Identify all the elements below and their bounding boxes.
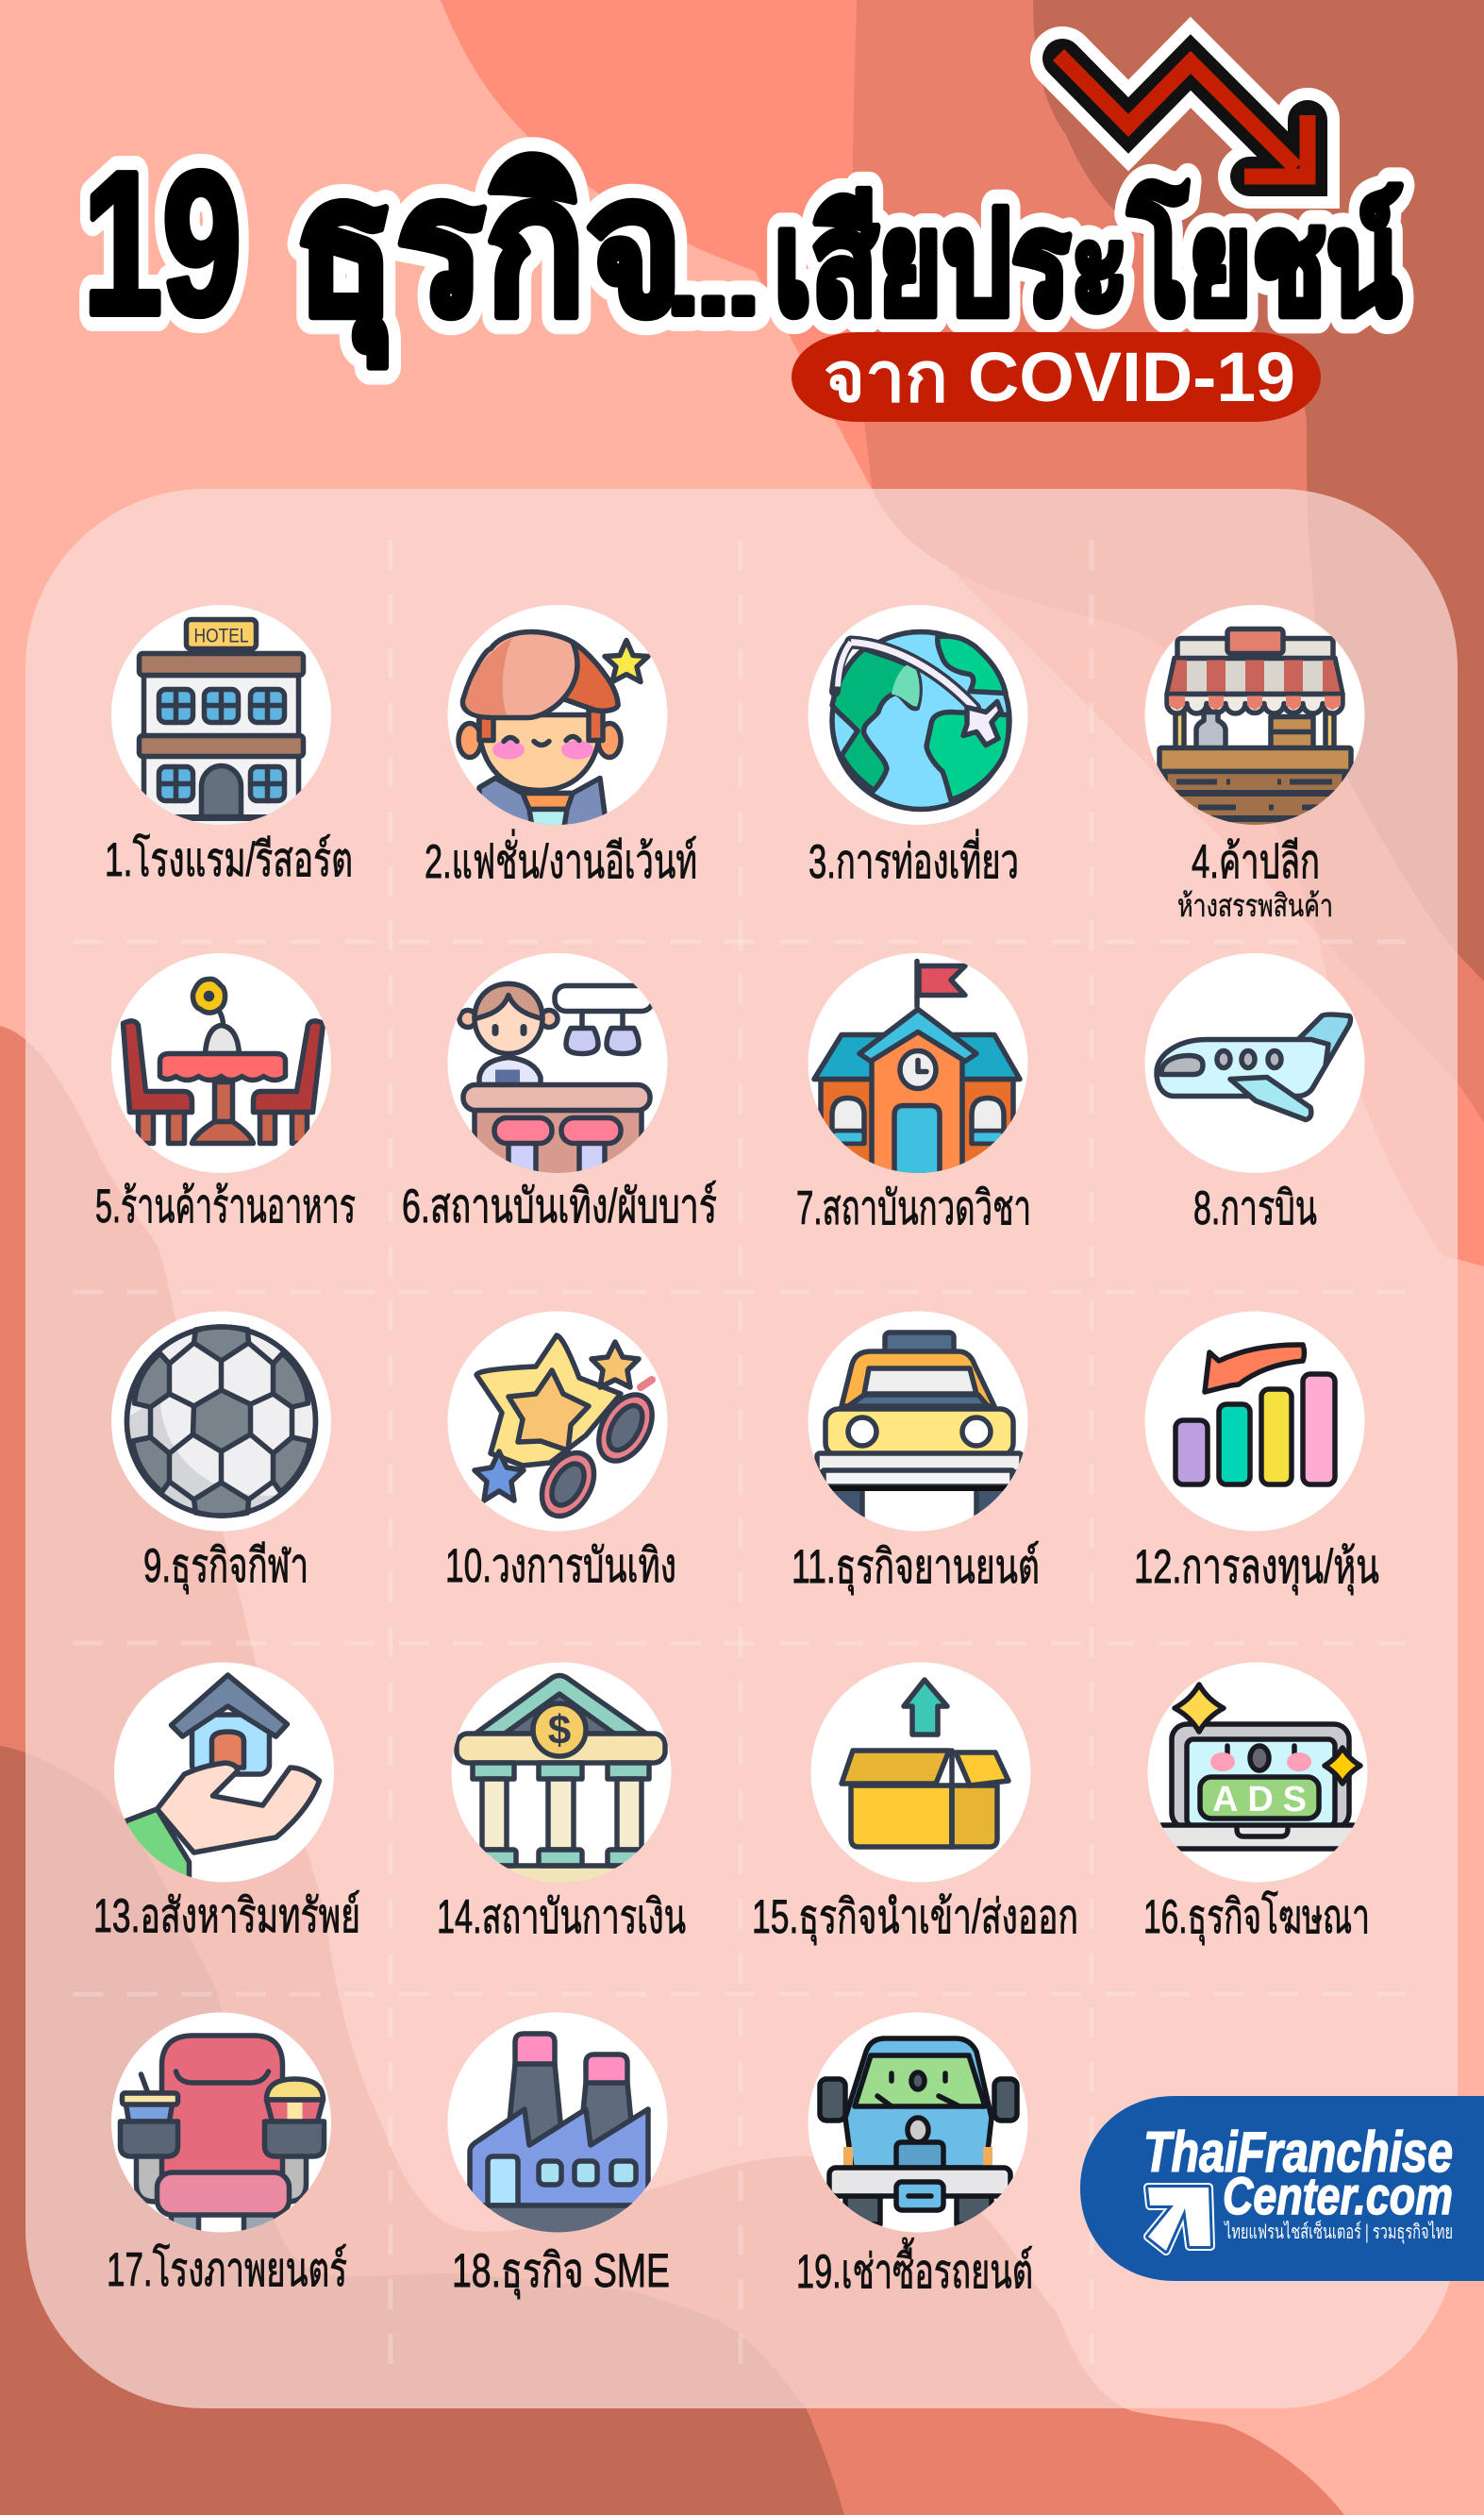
item 16: advertising: [1143, 1663, 1370, 1945]
item 15: import / export: [752, 1663, 1078, 1945]
icon: market stall: [1145, 605, 1364, 829]
grid: dashed dividers: [73, 540, 1406, 2364]
label: 15.ธุรกิจนำเข้า/ส่งออก: [752, 1890, 1078, 1945]
label: 4.ค้าปลีก: [1192, 835, 1320, 888]
icon: bank: $: [548, 1707, 571, 1753]
icon: box with arrow: [811, 1663, 1030, 1882]
label: 8.การบิน: [1193, 1182, 1317, 1234]
label: 3.การท่องเที่ยว: [809, 830, 1019, 888]
item 4: retail: [1145, 605, 1364, 923]
title: ...: [668, 225, 759, 335]
logo: ThaiFranchise Center.com: [1080, 2096, 1484, 2281]
label: 2.แฟชั่น/งานอีเว้นท์: [425, 830, 697, 888]
label: 5.ร้านค้าร้านอาหาร: [95, 1180, 356, 1232]
item 14: financial institutions: [437, 1663, 686, 1943]
item 6: entertainment venues / pubs: [402, 953, 717, 1232]
label: 18.ธุรกิจ SME: [452, 2244, 670, 2299]
label: 13.อสังหาริมทรัพย์: [93, 1889, 360, 1942]
label: 17.โรงภาพยนตร์: [107, 2243, 347, 2296]
title: ...: [668, 225, 759, 335]
label: [1177, 835, 1333, 923]
badge: from COVID-19: จาก COVID-19: [824, 338, 1295, 416]
item 1: hotel: [105, 605, 353, 886]
icon: logo arrow: [1148, 2188, 1210, 2251]
item 9: sports: [111, 1312, 331, 1594]
icon: cinema seat: [111, 2012, 331, 2240]
arrow: falling trend: [1059, 55, 1308, 176]
icon: school: [808, 953, 1028, 1182]
icon: house in hand: [114, 1663, 334, 1886]
label: 10.วงการบันเทิง: [445, 1539, 676, 1592]
label: 7.สถาบันกวดวิชา: [796, 1182, 1031, 1234]
item 5: restaurants: [95, 953, 356, 1232]
icon: globe: [808, 605, 1028, 825]
item 19: car leasing: [796, 2012, 1033, 2298]
item 11: automotive: [792, 1312, 1040, 1595]
icon: factory: [447, 2012, 668, 2243]
title: ธุรกิจ: [294, 139, 683, 367]
title: [83, 129, 1402, 367]
item 10: entertainment industry: [445, 1312, 676, 1592]
label: 14.สถาบันการเงิน: [437, 1890, 686, 1943]
icon: taxi: [808, 1312, 1028, 1531]
panel: translucent rounded card: [25, 489, 1458, 2408]
icon: hotel: [111, 605, 331, 836]
icon: truck: [808, 2012, 1028, 2233]
icon: stars and sunglasses: [447, 1312, 668, 1531]
item 7: tutoring schools: [796, 953, 1031, 1234]
label: 19.เช่าซื้อรถยนต์: [796, 2238, 1033, 2298]
label: 16.ธุรกิจโฆษณา: [1143, 1890, 1370, 1945]
label: 6.สถานบันเทิง/ผับบาร์: [402, 1180, 717, 1232]
title: 19: [83, 129, 242, 357]
item 13: real estate: [93, 1663, 360, 1942]
label: 12.การลงทุน/หุ้น: [1134, 1540, 1379, 1595]
icon: laptop ads: [1147, 1663, 1368, 1882]
item 3: tourism: [808, 605, 1028, 888]
title: ธุรกิจ: [294, 139, 683, 367]
icon: bartender: [447, 953, 668, 1185]
icon: dining table: [111, 953, 331, 1173]
title: 19: [83, 129, 242, 357]
label: ห้างสรรพสินค้า: [1177, 888, 1333, 923]
item 18: SME: [447, 2012, 670, 2299]
item 12: investment / stocks: [1134, 1312, 1379, 1595]
icon: soccer ball: [111, 1312, 331, 1531]
icon: bar chart with arrow: [1145, 1312, 1364, 1531]
icon: airplane: [1145, 953, 1364, 1173]
icon: bank: [451, 1663, 672, 1885]
icon: fashion person: [447, 605, 668, 832]
item 2: fashion / events: [425, 605, 697, 888]
label: 11.ธุรกิจยานยนต์: [792, 1540, 1040, 1595]
label: 9.ธุรกิจกีฬา: [143, 1539, 308, 1594]
label: 1.โรงแรม/รีสอร์ต: [105, 833, 353, 886]
icon: hotel: HOTEL: [194, 625, 249, 647]
item 8: aviation: [1145, 953, 1364, 1234]
icon: laptop ads: ADS: [1212, 1780, 1307, 1819]
item 17: cinema: [107, 2012, 347, 2296]
